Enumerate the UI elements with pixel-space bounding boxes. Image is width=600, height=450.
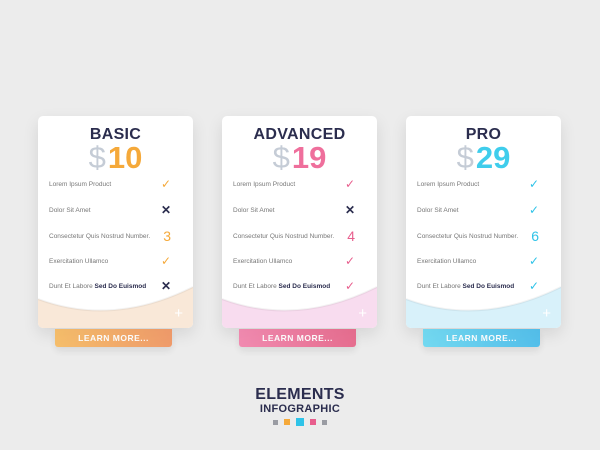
heading: pro: PRO xyxy=(466,126,501,143)
feature row 4: Exercitation Ullamco xyxy=(417,258,476,265)
feature row 5: ✕ xyxy=(161,279,171,293)
feature row 1 xyxy=(233,177,355,191)
feature row 3 xyxy=(49,228,171,244)
feature row 4 xyxy=(49,254,171,268)
feature row 2: Dolor Sit Amet xyxy=(417,207,459,214)
feature row 3 xyxy=(417,228,539,244)
feature row 2: Dolor Sit Amet xyxy=(49,207,91,214)
feature row 4 xyxy=(233,254,355,268)
button: basic: LEARN MORE... xyxy=(78,333,149,343)
wave footer xyxy=(222,286,377,328)
feature row 4: ✓ xyxy=(161,254,171,268)
feature row 3 xyxy=(233,228,355,244)
feature row 2: ✕ xyxy=(345,203,355,217)
feature row 5: Dunt Et Labore Sed Do Euismod xyxy=(49,283,146,290)
card: basic xyxy=(38,116,193,328)
feature row 3: Consectetur Quis Nostrud Number. xyxy=(417,233,518,240)
feature row 5: Dunt Et Labore Sed Do Euismod xyxy=(233,283,330,290)
price: $10: $10 xyxy=(89,140,142,175)
footer title: ELEMENTS xyxy=(255,386,345,403)
feature row 1: ✓ xyxy=(345,177,355,191)
feature row 4: Exercitation Ullamco xyxy=(233,258,292,265)
footer title: INFOGRAPHIC xyxy=(260,403,340,415)
feature row 2 xyxy=(233,203,355,217)
feature row 5: ✓ xyxy=(529,279,539,293)
button: advanced: LEARN MORE... xyxy=(262,333,333,343)
feature row 4: ✓ xyxy=(345,254,355,268)
feature row 1: ✓ xyxy=(529,177,539,191)
feature row 3: 6 xyxy=(531,228,539,244)
feature row 5: ✓ xyxy=(345,279,355,293)
feature row 4: Exercitation Ullamco xyxy=(49,258,108,265)
button: advanced xyxy=(239,329,356,347)
feature row 5 xyxy=(49,279,171,293)
feature row 3: 4 xyxy=(347,228,355,244)
feature row 2: ✕ xyxy=(161,203,171,217)
footer title xyxy=(255,386,345,415)
feature row 1: Lorem Ipsum Product xyxy=(417,181,479,188)
feature row 1: Lorem Ipsum Product xyxy=(233,181,295,188)
wave footer xyxy=(38,286,193,328)
button: basic xyxy=(55,329,172,347)
feature row 4: ✓ xyxy=(529,254,539,268)
button: pro: LEARN MORE... xyxy=(446,333,517,343)
feature row 1 xyxy=(49,177,171,191)
button: pro xyxy=(423,329,540,347)
icon: plus: + xyxy=(542,305,551,322)
price: $19: $19 xyxy=(273,140,326,175)
card: pro xyxy=(406,116,561,328)
feature row 2 xyxy=(417,203,539,217)
feature row 3: Consectetur Quis Nostrud Number. xyxy=(49,233,150,240)
feature row 1: ✓ xyxy=(161,177,171,191)
price: $29: $29 xyxy=(457,140,510,175)
feature row 3: Consectetur Quis Nostrud Number. xyxy=(233,233,334,240)
feature row 5: Dunt Et Labore Sed Do Euismod xyxy=(417,283,514,290)
feature row 3: 3 xyxy=(163,228,171,244)
feature row 1: Lorem Ipsum Product xyxy=(49,181,111,188)
feature row 5 xyxy=(233,279,355,293)
heading: basic: BASIC xyxy=(90,126,141,143)
feature row 2: ✓ xyxy=(529,203,539,217)
feature row 2 xyxy=(49,203,171,217)
feature row 5 xyxy=(417,279,539,293)
wave footer xyxy=(406,286,561,328)
heading: advanced: ADVANCED xyxy=(254,126,345,143)
feature row 1 xyxy=(417,177,539,191)
feature row 2: Dolor Sit Amet xyxy=(233,207,275,214)
card: advanced xyxy=(222,116,377,328)
icon: plus: + xyxy=(174,305,183,322)
feature row 4 xyxy=(417,254,539,268)
icon: plus: + xyxy=(358,305,367,322)
